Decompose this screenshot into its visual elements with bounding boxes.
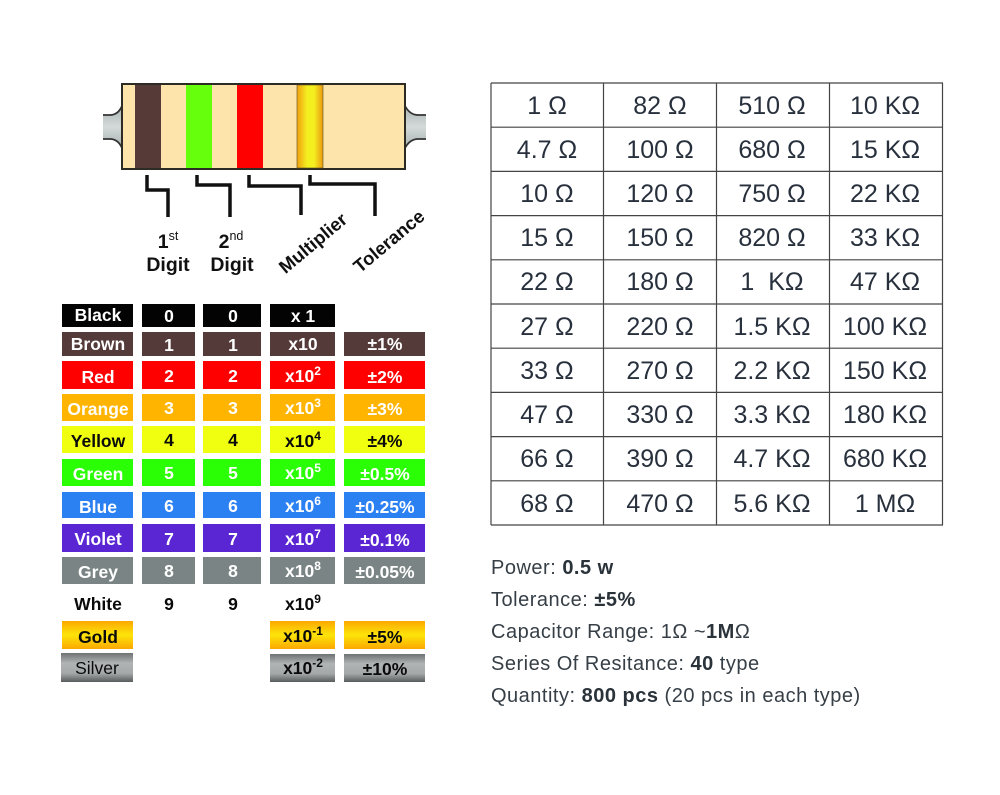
row: violet: x10 <box>285 529 314 549</box>
row: white: 9 <box>164 594 174 614</box>
table values: 4.7 KΩ <box>733 445 811 473</box>
connector: first digit <box>147 175 168 217</box>
table values: 15 KΩ <box>850 136 920 164</box>
label: 2nd digit: 2 <box>219 231 229 253</box>
row: yellow: 4 <box>228 430 238 450</box>
table values: 33 KΩ <box>850 224 920 252</box>
row: gold: x10 <box>283 626 312 646</box>
row: yellow <box>62 426 425 453</box>
row: green: 5 <box>228 463 238 483</box>
row: yellow: x10 <box>285 431 314 451</box>
table values: 15 Ω <box>520 224 574 252</box>
table values: 180 KΩ <box>843 401 927 429</box>
table values: 270 Ω <box>626 357 694 385</box>
table values: 47 Ω <box>520 401 574 429</box>
row: white: x10 <box>285 594 314 614</box>
label: multiplier: Multiplier <box>275 209 351 277</box>
table values: 820 Ω <box>738 224 806 252</box>
table values: 3.3 KΩ <box>733 401 811 429</box>
table values: 66 Ω <box>520 445 574 473</box>
row: white: White <box>74 594 122 614</box>
row: grey: 8 <box>164 561 174 581</box>
table values: 120 Ω <box>626 180 694 208</box>
table values: 680 Ω <box>738 136 806 164</box>
row: black: 0 <box>164 306 174 326</box>
table values: 22 KΩ <box>850 180 920 208</box>
row: blue <box>62 492 425 518</box>
row: red: 2 <box>314 364 321 378</box>
resistance value table <box>491 83 943 525</box>
table values: 27 Ω <box>520 313 574 341</box>
label: tolerance: Tolerance <box>349 205 429 277</box>
row: blue: 6 <box>228 496 238 516</box>
table values: 68 Ω <box>520 490 574 518</box>
spec: tolerance: Tolerance: ±5% <box>491 589 636 611</box>
row: blue: 6 <box>314 494 321 508</box>
table values: 22 Ω <box>520 268 574 296</box>
table values: 10 KΩ <box>850 92 920 120</box>
table values: 82 Ω <box>633 92 687 120</box>
table values <box>517 92 927 518</box>
label: 1st digit: st <box>169 229 179 243</box>
row: violet: Violet <box>74 529 122 549</box>
row: grey: 8 <box>228 561 238 581</box>
row: violet: 7 <box>164 529 174 549</box>
band: brown first digit <box>135 85 161 168</box>
row: red: Red <box>81 367 115 387</box>
resistor body <box>122 84 405 169</box>
row: brown <box>62 332 425 356</box>
row: violet: 7 <box>228 529 238 549</box>
row: brown: 1 <box>228 335 238 355</box>
row: brown: Brown <box>71 334 125 354</box>
row: green: 5 <box>164 463 174 483</box>
row: white: 9 <box>314 592 321 606</box>
row: yellow: ±4% <box>368 431 403 451</box>
row: brown: x10 <box>288 334 318 354</box>
connector: tolerance <box>310 175 375 216</box>
row: grey <box>62 557 425 584</box>
row: yellow: 4 <box>314 429 321 443</box>
table values: 100 Ω <box>626 136 694 164</box>
row: black: Black <box>75 305 122 325</box>
row: gold: Gold <box>78 627 118 647</box>
row: green: x10 <box>285 463 314 483</box>
row: red: 2 <box>164 366 174 386</box>
row: black <box>62 304 335 327</box>
row: red: x10 <box>285 366 314 386</box>
row: orange: 3 <box>228 398 238 418</box>
row: blue: ±0.25% <box>355 497 415 517</box>
row: red: ±2% <box>368 367 403 387</box>
row: silver: Silver <box>75 658 119 678</box>
row: green: ±0.5% <box>360 464 410 484</box>
band: red multiplier <box>237 85 263 168</box>
row: silver: x10 <box>283 658 312 678</box>
label: 1st digit: 1 <box>158 231 169 253</box>
row: yellow: 4 <box>164 430 174 450</box>
band: gold tolerance <box>297 85 323 168</box>
row: grey: ±0.05% <box>355 562 415 582</box>
row: orange: x10 <box>285 398 314 418</box>
table values: 100 KΩ <box>843 313 927 341</box>
row: white: 9 <box>228 594 238 614</box>
row: gold: ±5% <box>368 627 403 647</box>
row: black: x 1 <box>291 306 315 326</box>
label: 2nd digit: nd <box>229 229 243 243</box>
row: silver: ±10% <box>363 659 408 679</box>
row: green: 5 <box>314 461 321 475</box>
row: green: Green <box>73 464 123 484</box>
table values: 180 Ω <box>626 268 694 296</box>
table values: 470 Ω <box>626 490 694 518</box>
label: 2nd digit: Digit <box>210 254 254 276</box>
row: silver: -2 <box>312 656 323 670</box>
table values: 150 Ω <box>626 224 694 252</box>
band: green second digit <box>186 85 212 168</box>
table values: 750 Ω <box>738 180 806 208</box>
row: blue: Blue <box>79 497 117 517</box>
row: violet: ±0.1% <box>360 530 410 550</box>
row: gold: -1 <box>312 624 323 638</box>
table values: 4.7 Ω <box>517 136 577 164</box>
icon: right lead <box>405 106 426 148</box>
row: blue: 6 <box>164 496 174 516</box>
table values: 1.5 KΩ <box>733 313 811 341</box>
row: red <box>62 361 425 389</box>
spec: range: Capacitor Range: 1Ω ~1MΩ <box>491 621 750 643</box>
label: 1st digit: Digit <box>146 254 190 276</box>
table values: 1 MΩ <box>855 490 915 518</box>
table values: 680 KΩ <box>843 445 927 473</box>
row: orange: 3 <box>314 396 321 410</box>
table values: 47 KΩ <box>850 268 920 296</box>
spec: quantity: Quantity: 800 pcs (20 pcs in each type) <box>491 685 861 707</box>
table values: 150 KΩ <box>843 357 927 385</box>
row: orange <box>62 394 425 421</box>
row: brown: 1 <box>164 335 174 355</box>
row: grey: 8 <box>314 559 321 573</box>
connector: second digit <box>197 175 230 217</box>
row: brown: ±1% <box>368 334 403 354</box>
table values: 2.2 KΩ <box>733 357 811 385</box>
colour code chart <box>61 304 425 682</box>
spec: series: Series Of Resitance: 40 type <box>491 653 760 675</box>
table values: 1 Ω <box>527 92 567 120</box>
row: red: 2 <box>228 366 238 386</box>
row: violet: 7 <box>314 527 321 541</box>
table values: 10 Ω <box>520 180 574 208</box>
table values: 1 KΩ <box>740 268 804 296</box>
row: grey: x10 <box>285 561 314 581</box>
table values: 33 Ω <box>520 357 574 385</box>
table values: 220 Ω <box>626 313 694 341</box>
resistor diagram <box>103 84 429 277</box>
table values: 330 Ω <box>626 401 694 429</box>
specifications text <box>491 557 861 707</box>
row: silver <box>61 653 425 682</box>
row: white <box>74 592 321 614</box>
table values: 390 Ω <box>626 445 694 473</box>
row: violet <box>62 524 425 552</box>
connector: multiplier <box>249 175 301 215</box>
row: orange: ±3% <box>368 399 403 419</box>
table grid <box>491 83 943 525</box>
label: 2nd digit <box>210 229 254 276</box>
row: yellow: Yellow <box>71 431 126 451</box>
icon: left lead <box>103 106 122 148</box>
row: gold <box>62 621 425 649</box>
label: 1st digit <box>146 229 190 276</box>
row: blue: x10 <box>285 496 314 516</box>
table values: 5.6 KΩ <box>733 490 811 518</box>
table values: 510 Ω <box>738 92 806 120</box>
row: green <box>62 459 425 486</box>
spec: power: Power: 0.5 w <box>491 557 614 579</box>
row: black: 0 <box>228 306 238 326</box>
row: orange: Orange <box>67 399 129 419</box>
row: orange: 3 <box>164 398 174 418</box>
row: grey: Grey <box>78 562 118 582</box>
